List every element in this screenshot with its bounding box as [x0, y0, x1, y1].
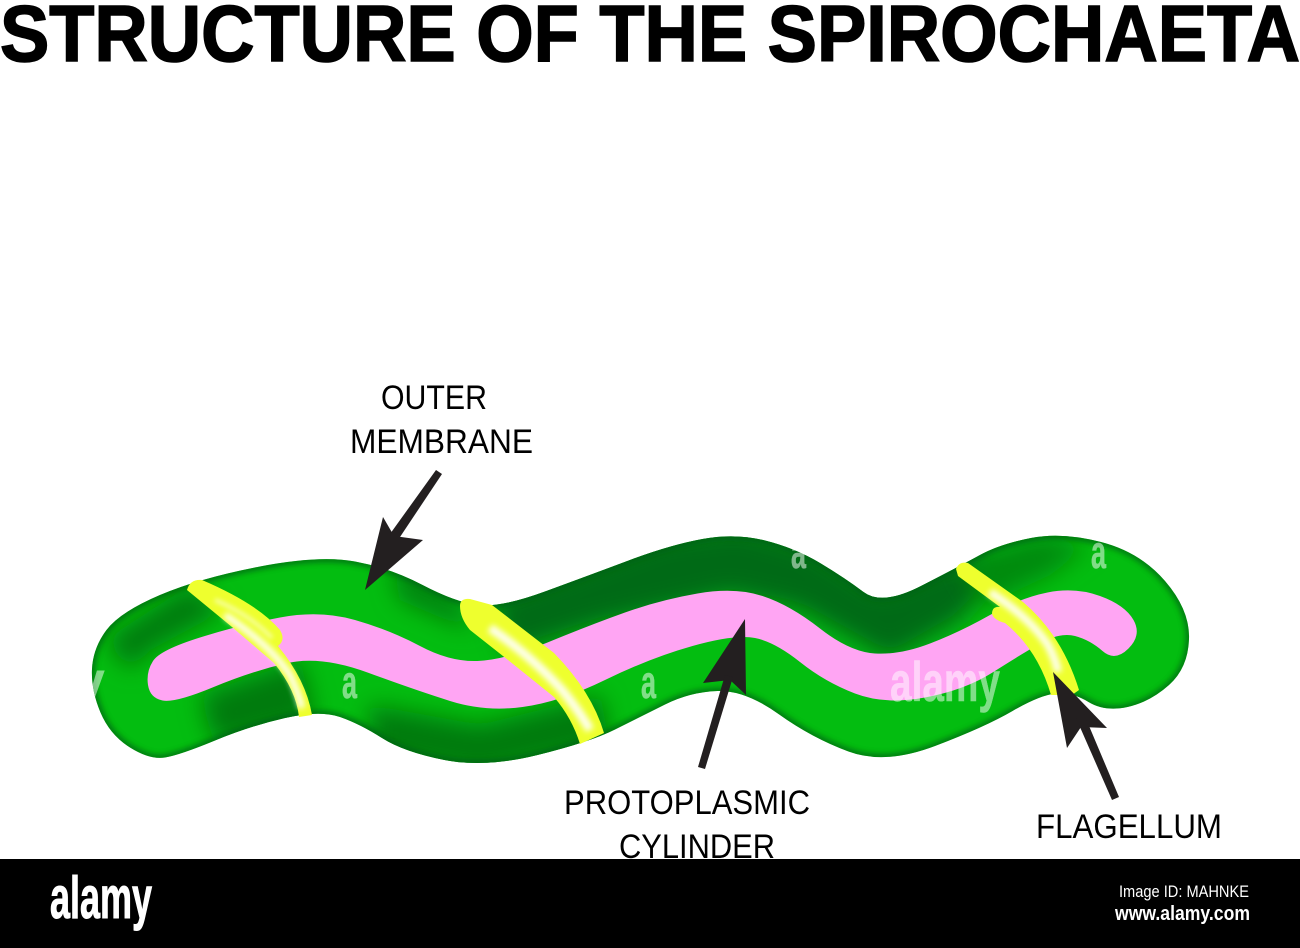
watermark marks — [342, 526, 1106, 713]
footer logo: alamy — [50, 865, 152, 931]
watermark in membrane edge: y — [75, 649, 105, 712]
label: protoplasmic cylinder — [564, 784, 810, 866]
footer image id: Image ID: MAHNKE — [1119, 882, 1249, 901]
outer membrane — [92, 536, 1190, 763]
arrow: outer membrane — [365, 470, 442, 590]
watermark marks: alamy — [890, 650, 1000, 713]
label: protoplasmic cylinder: CYLINDER — [619, 828, 775, 866]
protoplasmic cylinder — [148, 590, 1137, 709]
watermark marks: a — [791, 526, 806, 578]
flagellum band 1 — [187, 580, 312, 717]
label: flagellum: FLAGELLUM — [1036, 808, 1222, 846]
footer bar — [0, 859, 1300, 948]
watermark marks: a — [342, 656, 357, 708]
flagellum band 3 — [956, 563, 1079, 695]
arrow: protoplasmic cylinder — [698, 619, 746, 769]
label: outer membrane — [350, 379, 533, 461]
label: outer membrane: OUTER — [381, 379, 487, 417]
watermark marks: a — [1091, 526, 1106, 578]
spirochaeta body — [92, 536, 1190, 763]
watermark marks: a — [641, 656, 656, 708]
footer website: www.alamy.com — [1114, 903, 1250, 925]
flagellum band 2 — [460, 599, 604, 744]
arrow: flagellum — [1053, 672, 1119, 800]
label: protoplasmic cylinder: PROTOPLASMIC — [564, 784, 810, 822]
label: outer membrane: MEMBRANE — [350, 423, 533, 461]
